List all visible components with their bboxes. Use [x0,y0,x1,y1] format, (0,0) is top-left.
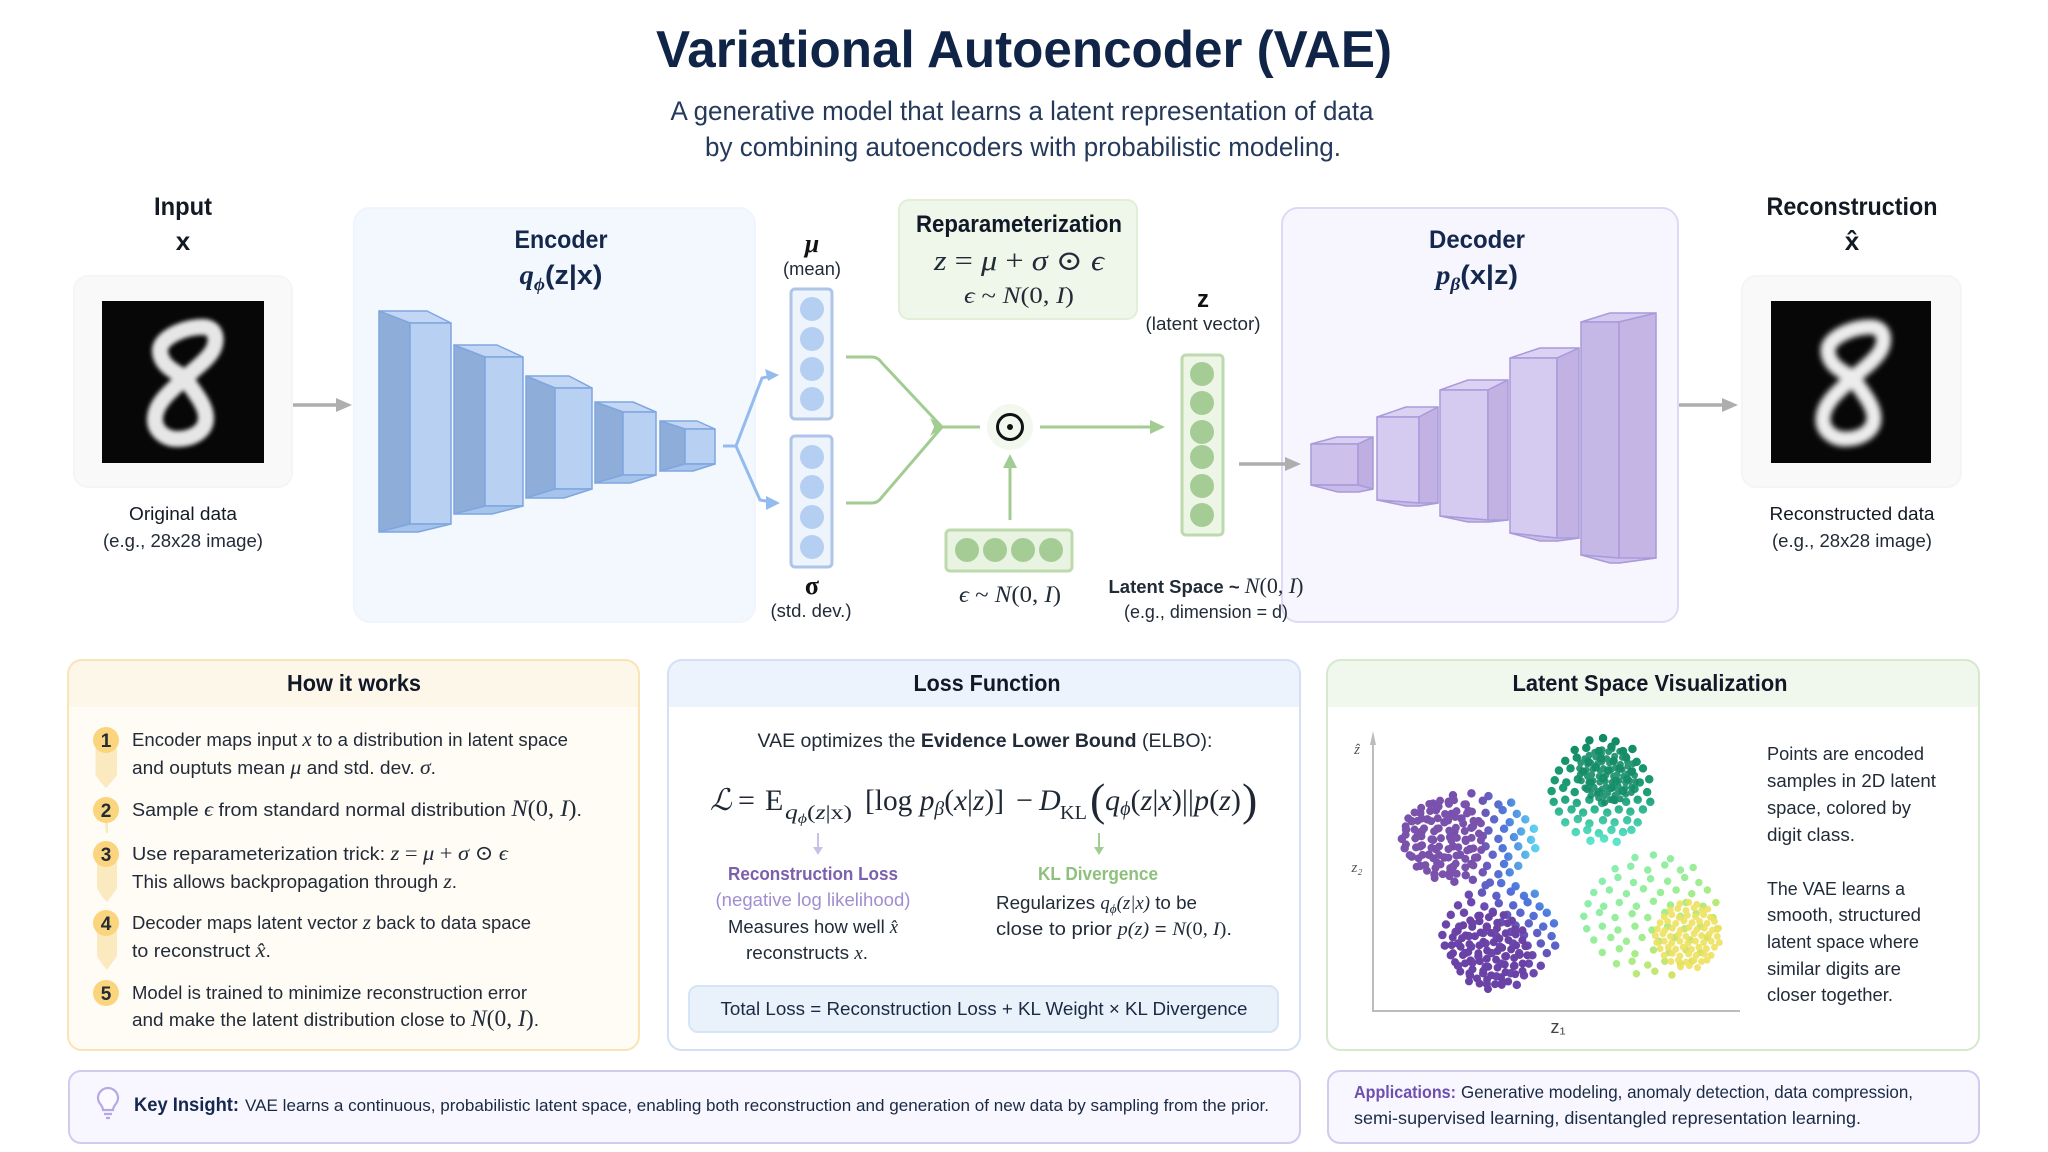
panel: loss function [668,660,1300,1050]
step 5: and make the latent distribution close to N(0, I). [132,1006,539,1031]
reconstruction caption: Reconstructed data [1770,503,1935,524]
step 1: and ouptuts mean μ and std. dev. σ. [132,755,436,779]
step 5 [93,980,539,1031]
mu vector [783,229,841,419]
arrow: epsilon to operator [1003,454,1017,520]
sigma vector: (std. dev.) [770,600,852,621]
cluster: purple lower core [1440,901,1538,998]
decoder heading: (x|z) [1460,260,1518,290]
latent description: similar digits are [1767,958,1901,979]
KL divergence note: to be [1155,892,1196,913]
reconstruction heading: Reconstruction [1766,193,1938,221]
subtitle: A generative model that learns a latent representation of data [670,96,1374,126]
ELBO formula: ( [1090,774,1105,825]
arrow: decoder to reconstruction [1679,398,1738,412]
loss function heading: Loss Function [914,670,1060,696]
epsilon vector: ϵ ~ N(0, I) [959,582,1061,607]
mu vector: (mean) [783,258,841,279]
latent space caption [1108,573,1304,622]
encoder heading: (z|x) [545,260,602,290]
latent description: smooth, structured [1767,904,1921,925]
ELBO intro: VAE optimizes the Evidence Lower Bound (ELBO): [758,730,1212,752]
key insight text: VAE learns a continuous, probabilistic latent space, enabling both reconstruction and generation of new data by sampling from the prior. [245,1096,1269,1115]
plot axes [1350,731,1740,1037]
latent description: latent space where [1767,931,1919,952]
ELBO formula: ϕ [1120,798,1131,820]
icon: light bulb [98,1088,118,1118]
step 5: Model is trained to minimize reconstruction error [132,982,527,1003]
sigma vector: σ [805,571,819,600]
encoder heading [514,226,608,294]
step 2: 2 [101,801,111,822]
step 3: This allows backpropagation through z. [132,869,457,893]
decoder heading: Decoder [1429,226,1525,254]
step 4: Decoder maps latent vector z back to data space [132,910,531,934]
step 2 [93,796,582,833]
input heading [154,193,213,256]
panel: encoder [354,208,755,622]
arrow: operator to z [1040,420,1165,434]
total loss bar [689,986,1278,1032]
reconstruction loss note: (negative log likelihood) [716,889,910,910]
latent space caption: Latent Space ~ N(0, I) [1108,573,1304,598]
latent description: Points are encoded [1767,743,1924,764]
input heading: x [176,226,191,256]
latent vector z: (latent vector) [1146,313,1260,334]
latent vector z: z [1197,286,1209,313]
KL divergence note: Regularizes q [996,892,1110,914]
reparameterization operator [987,404,1033,450]
reconstruction heading [1766,193,1938,256]
input heading: Input [154,193,213,221]
cluster: green to yellow [1584,855,1717,975]
latent description [1767,743,1936,1005]
title: Variational Autoencoder (VAE) [656,21,1392,79]
subtitle [670,96,1374,162]
reconstruction heading: x̂ [1845,226,1860,256]
encoder blocks [379,311,715,532]
panel: how it works [68,660,639,1050]
input caption: (e.g., 28x28 image) [103,530,263,551]
panel: reparameterization: Reparameterization [916,211,1122,238]
reconstruction loss note: Measures how well x̂ [728,916,899,938]
ELBO formula: ( [807,802,816,824]
ELBO formula: ) [1242,774,1257,825]
ELBO formula: ( [944,784,954,817]
plot axes: z₁ [1550,1017,1566,1037]
panel: decoder [1282,208,1678,622]
panel: applications: Applications: [1354,1082,1456,1102]
ELBO formula: − [1016,784,1033,817]
ELBO formula: E [765,784,783,817]
ELBO formula: q [785,802,798,824]
latent description: digit class. [1767,824,1855,845]
cluster: purple upper [1402,793,1535,883]
reconstruction loss note [716,863,910,964]
cluster: dark green core [1570,738,1645,811]
sigma vector [770,436,852,621]
step 3: Use reparameterization trick: z = μ + σ ⊙ ϵ [132,841,510,865]
step 2: Sample ϵ from standard normal distribution N(0, I). [132,796,582,821]
input caption: Original data [129,503,238,524]
reconstruction caption [1770,503,1935,551]
panel: applications: semi-supervised learning, disentangled representation learning. [1354,1108,1861,1128]
decoder heading: β [1449,274,1461,294]
ELBO formula: = [738,784,755,817]
ELBO formula: β [933,798,944,820]
latent description: closer together. [1767,984,1893,1005]
reconstruction column [1742,193,1961,551]
input column [74,193,292,551]
arrows: mu and sigma merge [846,357,980,503]
cluster: green [1552,738,1650,842]
ELBO formula [710,774,1257,827]
encoder heading: ϕ [534,274,545,294]
reconstruction loss note: reconstructs x. [746,942,868,964]
input image card [74,276,292,487]
decoder blocks [1311,313,1656,563]
arrow: encoder fork to mu and sigma [723,369,780,510]
panel: key insight [69,1071,1300,1143]
panel: reparameterization: ϵ ~ N(0, I) [964,283,1074,308]
ELBO formula: ( [1131,784,1141,817]
step 4: 4 [101,914,112,935]
ELBO formula: KL [1060,802,1087,824]
total loss bar: Total Loss = Reconstruction Loss + KL Weight × KL Divergence [720,998,1248,1019]
KL divergence note: (z|x) [1117,894,1150,914]
how it works heading: How it works [287,670,421,696]
ELBO formula: D [1038,784,1061,817]
decoder heading: p [1434,260,1450,290]
latent description: The VAE learns a [1767,878,1906,899]
input caption [103,503,263,551]
step 1: 1 [101,731,112,752]
ELBO formula: z|x) [816,802,846,824]
plot axes: ẑ [1353,742,1360,758]
panel: reparameterization [899,200,1137,319]
plot axes: z₂ [1350,860,1363,876]
ELBO formula: z|x)||p(z) [1141,784,1241,817]
panel: applications: Generative modeling, anomaly detection, data compression, [1461,1082,1913,1102]
KL divergence note [996,863,1232,940]
ELBO formula: [log p [865,784,935,817]
subtitle: by combining autoencoders with probabilistic modeling. [705,132,1341,162]
step 1 [93,727,568,788]
scatter plot [1350,731,1740,1037]
reconstruction image card [1742,276,1961,487]
latent space caption: (e.g., dimension = d) [1124,601,1288,622]
ELBO formula: x|z)] [954,784,1004,817]
cluster: purple upper core [1389,784,1498,892]
reconstruction caption: (e.g., 28x28 image) [1772,530,1932,551]
KL divergence note: KL Divergence [1038,863,1158,884]
mu vector: μ [803,229,819,258]
latent description: samples in 2D latent [1767,770,1936,791]
encoder heading: q [520,260,534,290]
step 3 [93,841,510,902]
ELBO formula: ℒ [710,784,733,817]
latent vector z [1146,286,1260,535]
KL divergence note: close to prior p(z) = N(0, I). [996,918,1232,940]
decoder heading [1429,226,1525,294]
arrow: z to decoder [1239,457,1301,471]
encoder heading: Encoder [514,226,608,254]
step 1: Encoder maps input x to a distribution in latent space [132,727,568,751]
latent description: space, colored by [1767,797,1912,818]
ELBO formula: ϕ [798,812,807,827]
cluster: yellow core [1655,902,1719,968]
arrow: to reconstruction loss [813,833,823,855]
key insight text: Key Insight: [134,1095,239,1116]
arrow: to KL divergence [1094,833,1104,855]
step 3: 3 [101,845,111,866]
KL divergence note: ϕ [1110,901,1117,916]
latent panel heading: Latent Space Visualization [1512,670,1788,696]
epsilon vector [946,530,1072,607]
panel: reparameterization: z = μ + σ ⊙ ϵ [933,246,1106,277]
step 4 [93,910,531,970]
reconstruction loss note: Reconstruction Loss [728,863,898,884]
step 4: to reconstruct x̂. [132,938,271,962]
panel: applications [1328,1071,1979,1143]
ELBO formula: q [1105,784,1120,817]
cluster: purple lower [1442,883,1555,985]
arrow: input to encoder [293,398,352,412]
panel: latent space visualization [1327,660,1979,1050]
step 5: 5 [101,984,112,1005]
